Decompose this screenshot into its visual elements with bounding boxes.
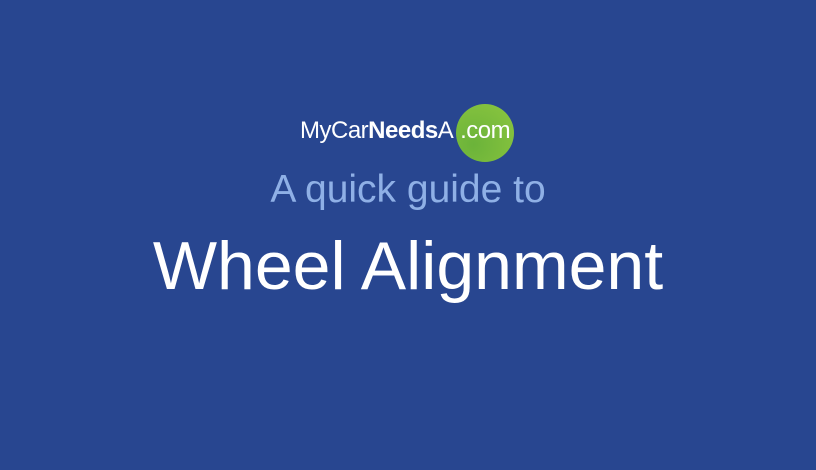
title: Wheel Alignment	[153, 228, 663, 304]
logo	[300, 104, 514, 162]
logo text: MyCarNeedsA .com	[300, 117, 510, 144]
subtitle: A quick guide to	[270, 168, 546, 211]
icon: green circle	[456, 104, 514, 162]
